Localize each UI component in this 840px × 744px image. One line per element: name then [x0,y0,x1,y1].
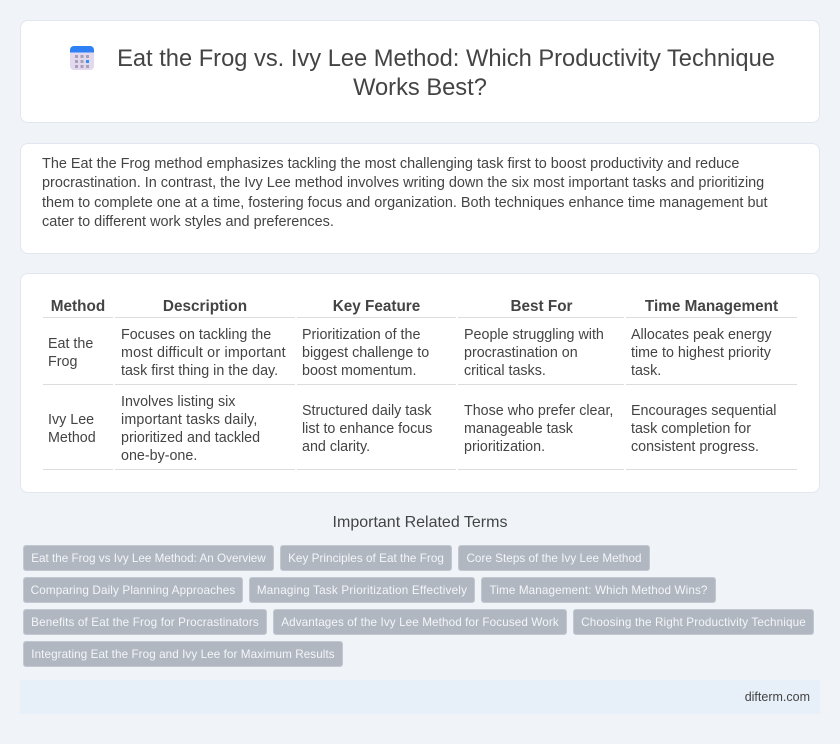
table header row [51,298,778,315]
icon: calendar [70,46,94,70]
related terms tags [23,545,814,667]
table row: Eat the Frog: biggest challenge to [302,345,429,361]
title: Eat the Frog vs. Ivy Lee Method: Which Productivity Technique [117,46,775,72]
table row: Eat the Frog: task. [631,363,661,379]
panel: introduction [20,143,820,254]
title: Works Best? [353,75,487,101]
table row: Ivy Lee Method: Ivy Lee [48,412,94,428]
table row: Eat the Frog: procrastination on [464,345,578,361]
table row: Eat the Frog [48,327,772,379]
text block: introduction: them to complete one at a time, fostering focus and organization. Both techniques enhance time management but [42,195,768,211]
footer text: difterm.com [745,690,810,704]
table row: Ivy Lee Method: prioritized and tackled [121,430,260,446]
text block: introduction: The Eat the Frog method emphasizes tackling the most challenging task first to boost productivity and reduce [42,156,739,172]
related terms tags: Comparing Daily Planning Approaches [31,584,235,597]
table row: Ivy Lee Method: Structured daily task [302,403,432,419]
table row: Ivy Lee Method: Those who prefer clear, [464,403,613,419]
table row: Ivy Lee Method: list to enhance focus [302,421,432,437]
heading: important related terms: Important Related Terms [333,514,507,531]
table row: Ivy Lee Method [48,394,776,464]
text block: introduction: procrastination. In contrast, the Ivy Lee method involves writing down the six most important tasks and prioritizing [42,175,764,191]
table row: Eat the Frog: most difficult or important [121,345,286,361]
related terms tags: Managing Task Prioritization Effectively [257,584,467,597]
table row: Ivy Lee Method: task completion for [631,421,751,437]
table header row: Method [51,298,105,315]
title [117,46,775,101]
related terms tags: Choosing the Right Productivity Technique [581,616,806,629]
table row: Eat the Frog: task first thing in the day. [121,363,278,379]
table header row: Best For [510,298,573,315]
footer bar [20,680,820,714]
table row: Ivy Lee Method: Method [48,430,96,446]
table row: Ivy Lee Method: manageable task [464,421,573,437]
table header row: Time Management [645,298,778,315]
panel: header [20,20,820,123]
table row: Eat the Frog: Prioritization of the [302,327,420,343]
related terms tags: Integrating Eat the Frog and Ivy Lee for Maximum Results [31,648,335,661]
table row: Eat the Frog: People struggling with [464,327,604,343]
related terms tags: Advantages of the Ivy Lee Method for Focused Work [281,616,559,629]
table row: Ivy Lee Method: Encourages sequential [631,403,776,419]
table row: Eat the Frog: time to highest priority [631,345,771,361]
table row: Eat the Frog: Focuses on tackling the [121,327,271,343]
table row: Ivy Lee Method: Involves listing six [121,394,235,410]
related terms tags: Core Steps of the Ivy Lee Method [466,552,642,565]
table row: Ivy Lee Method: important tasks daily, [121,412,258,428]
table row: Eat the Frog: Allocates peak energy [631,327,772,343]
related terms tags: Key Principles of Eat the Frog [288,552,444,565]
table header row: Description [163,298,247,315]
table row: Ivy Lee Method: one-by-one. [121,448,197,464]
table row: Eat the Frog: Eat the [48,336,93,352]
text block: introduction [42,156,768,230]
table row: Ivy Lee Method: prioritization. [464,439,545,455]
table row: Ivy Lee Method: consistent progress. [631,439,759,455]
table row: Eat the Frog: Frog [48,354,77,370]
table row: Ivy Lee Method: and clarity. [302,439,370,455]
related terms tags: Eat the Frog vs Ivy Lee Method: An Overview [31,552,266,565]
related terms tags: Time Management: Which Method Wins? [489,584,708,597]
panel: comparison table [20,273,820,493]
table header row: Key Feature [333,298,420,315]
table row: Eat the Frog: critical tasks. [464,363,546,379]
text block: introduction: cater to different work styles and preferences. [42,214,334,230]
related terms tags: Benefits of Eat the Frog for Procrastinators [31,616,259,629]
table row: Eat the Frog: boost momentum. [302,363,416,379]
